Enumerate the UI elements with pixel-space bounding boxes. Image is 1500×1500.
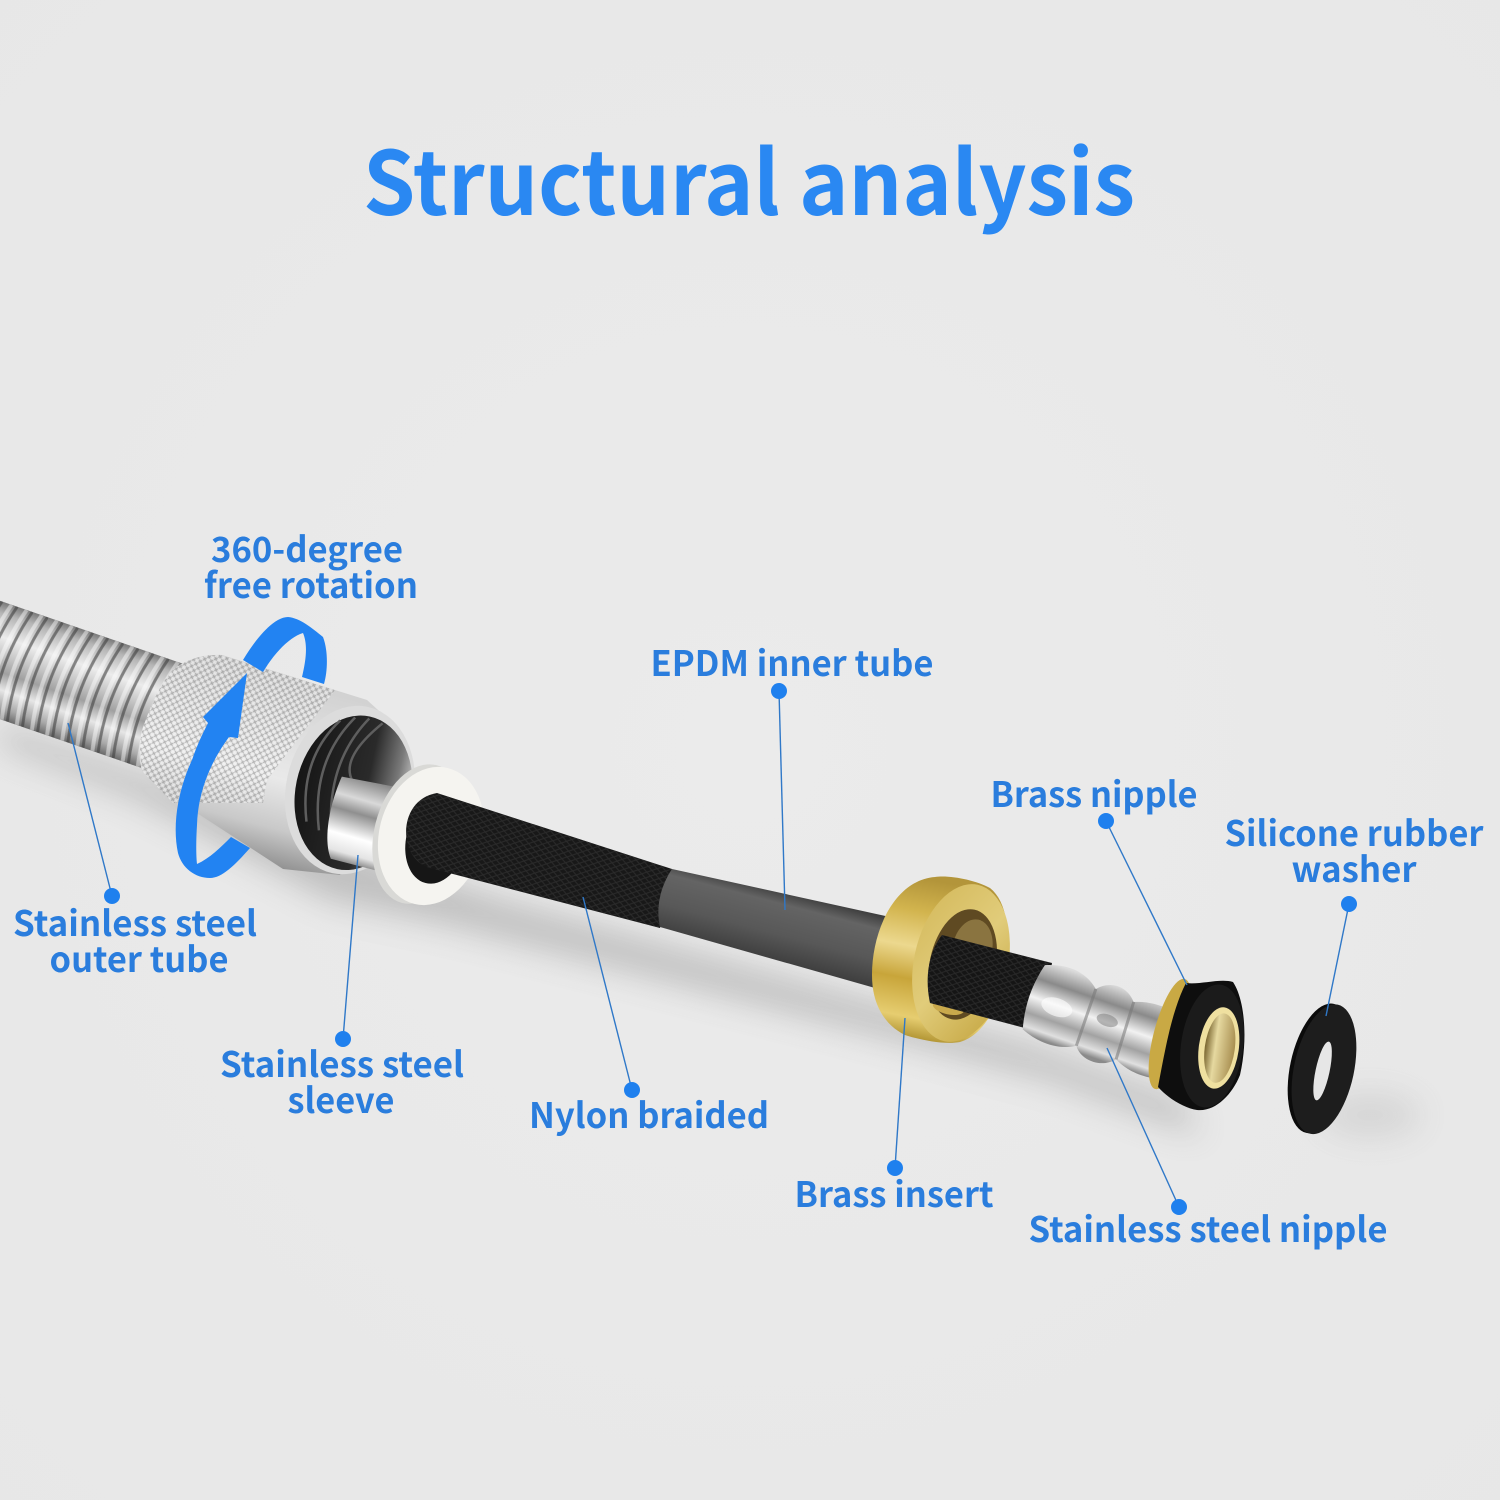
label: brass nipple bbox=[990, 767, 1198, 985]
label: stainless steel sleeve: sleeve bbox=[288, 1073, 394, 1124]
label: stainless steel outer tube: Stainless steel bbox=[13, 896, 257, 947]
stainless steel corrugated outer tube bbox=[0, 594, 184, 770]
label: silicone rubber washer: washer bbox=[1292, 842, 1417, 893]
label: stainless steel outer tube: outer tube bbox=[50, 932, 228, 983]
stainless steel sleeve bbox=[318, 768, 429, 880]
label: stainless steel nipple bbox=[1028, 1048, 1388, 1253]
rotation arrow bbox=[176, 617, 327, 878]
stainless steel crimped nipple bbox=[1016, 958, 1177, 1082]
brass insert ring bbox=[872, 875, 1024, 1051]
label: EPDM inner tube bbox=[650, 636, 934, 910]
label: EPDM inner tube: EPDM inner tube bbox=[650, 636, 934, 687]
knurled nut bbox=[139, 655, 400, 875]
nut opening with internal thread bbox=[270, 694, 430, 886]
label: brass insert bbox=[794, 1018, 994, 1218]
label: brass nipple: Brass nipple bbox=[990, 767, 1198, 818]
label: stainless steel sleeve: Stainless steel bbox=[220, 1037, 464, 1088]
label: brass insert: Brass insert bbox=[794, 1167, 994, 1218]
cast shadows bbox=[0, 725, 1420, 1137]
label: silicone rubber washer bbox=[1224, 806, 1484, 1016]
label: stainless steel nipple: Stainless steel nipple bbox=[1028, 1202, 1388, 1253]
label: nylon braided bbox=[529, 897, 769, 1139]
label: stainless steel sleeve bbox=[220, 855, 464, 1124]
black braided tube with grey inner section bbox=[406, 793, 890, 988]
silicone rubber washer bbox=[1277, 998, 1367, 1140]
label: silicone rubber washer: Silicone rubber bbox=[1224, 806, 1484, 857]
hose product illustration bbox=[0, 594, 1420, 1140]
label: 360-degree free rotation: free rotation bbox=[204, 558, 418, 609]
label: stainless steel outer tube bbox=[13, 723, 257, 983]
label: nylon braided: Nylon braided bbox=[529, 1088, 769, 1139]
brass collar and black rubber end bbox=[1140, 975, 1251, 1112]
black tube through brass ring bbox=[928, 935, 1052, 1032]
label: 360-degree free rotation: 360-degree bbox=[211, 522, 403, 573]
white washer bbox=[358, 754, 499, 918]
title: Structural analysis bbox=[363, 114, 1135, 241]
label: 360-degree free rotation bbox=[204, 522, 418, 609]
